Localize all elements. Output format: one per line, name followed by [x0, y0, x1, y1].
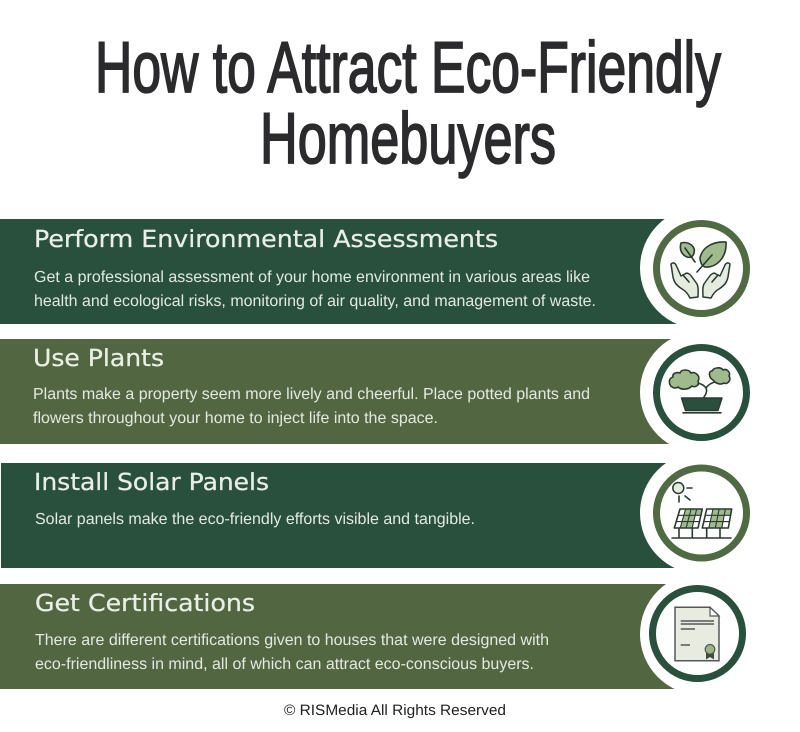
title — [95, 28, 721, 179]
text block: certifications description: There are different certifications given to houses that were designed with — [35, 632, 549, 649]
text block: certifications description: eco-friendliness in mind, all of which can attract eco-conscious buyers. — [35, 656, 534, 673]
text block: assessments description: Get a professional assessment of your home environment in various areas like — [34, 269, 590, 286]
heading: Use Plants: Use Plants — [33, 344, 164, 372]
text block: solar description: Solar panels make the eco-friendly efforts visible and tangible. — [35, 511, 475, 528]
title: Homebuyers — [260, 99, 556, 179]
text block: assessments description — [34, 269, 596, 310]
icon: hands holding leaves — [656, 224, 746, 314]
text block: certifications description — [35, 632, 549, 673]
icon: certificate — [652, 588, 742, 678]
icon: sun and solar panels — [656, 468, 746, 558]
text block: plants description: Plants make a property seem more lively and cheerful. Place potted plants and — [33, 386, 590, 403]
panel: Perform Environmental Assessments — [0, 207, 762, 329]
heading: Get Certifications: Get Certifications — [35, 589, 255, 617]
text block: plants description — [33, 386, 590, 427]
panel: Get Certifications — [0, 573, 762, 695]
icon: potted bonsai — [656, 348, 746, 438]
panel: Install Solar Panels — [1, 452, 762, 574]
text block: plants description: flowers throughout your home to inject life into the space. — [33, 410, 438, 427]
heading: Perform Environmental Assessments: Perform Environmental Assessments — [34, 225, 498, 253]
footer: © RISMedia All Rights Reserved — [284, 702, 506, 719]
text block: assessments description: health and ecological risks, monitoring of air quality, and management of waste. — [34, 293, 596, 310]
heading: Install Solar Panels: Install Solar Panels — [34, 468, 269, 496]
panel: Use Plants — [0, 331, 762, 453]
